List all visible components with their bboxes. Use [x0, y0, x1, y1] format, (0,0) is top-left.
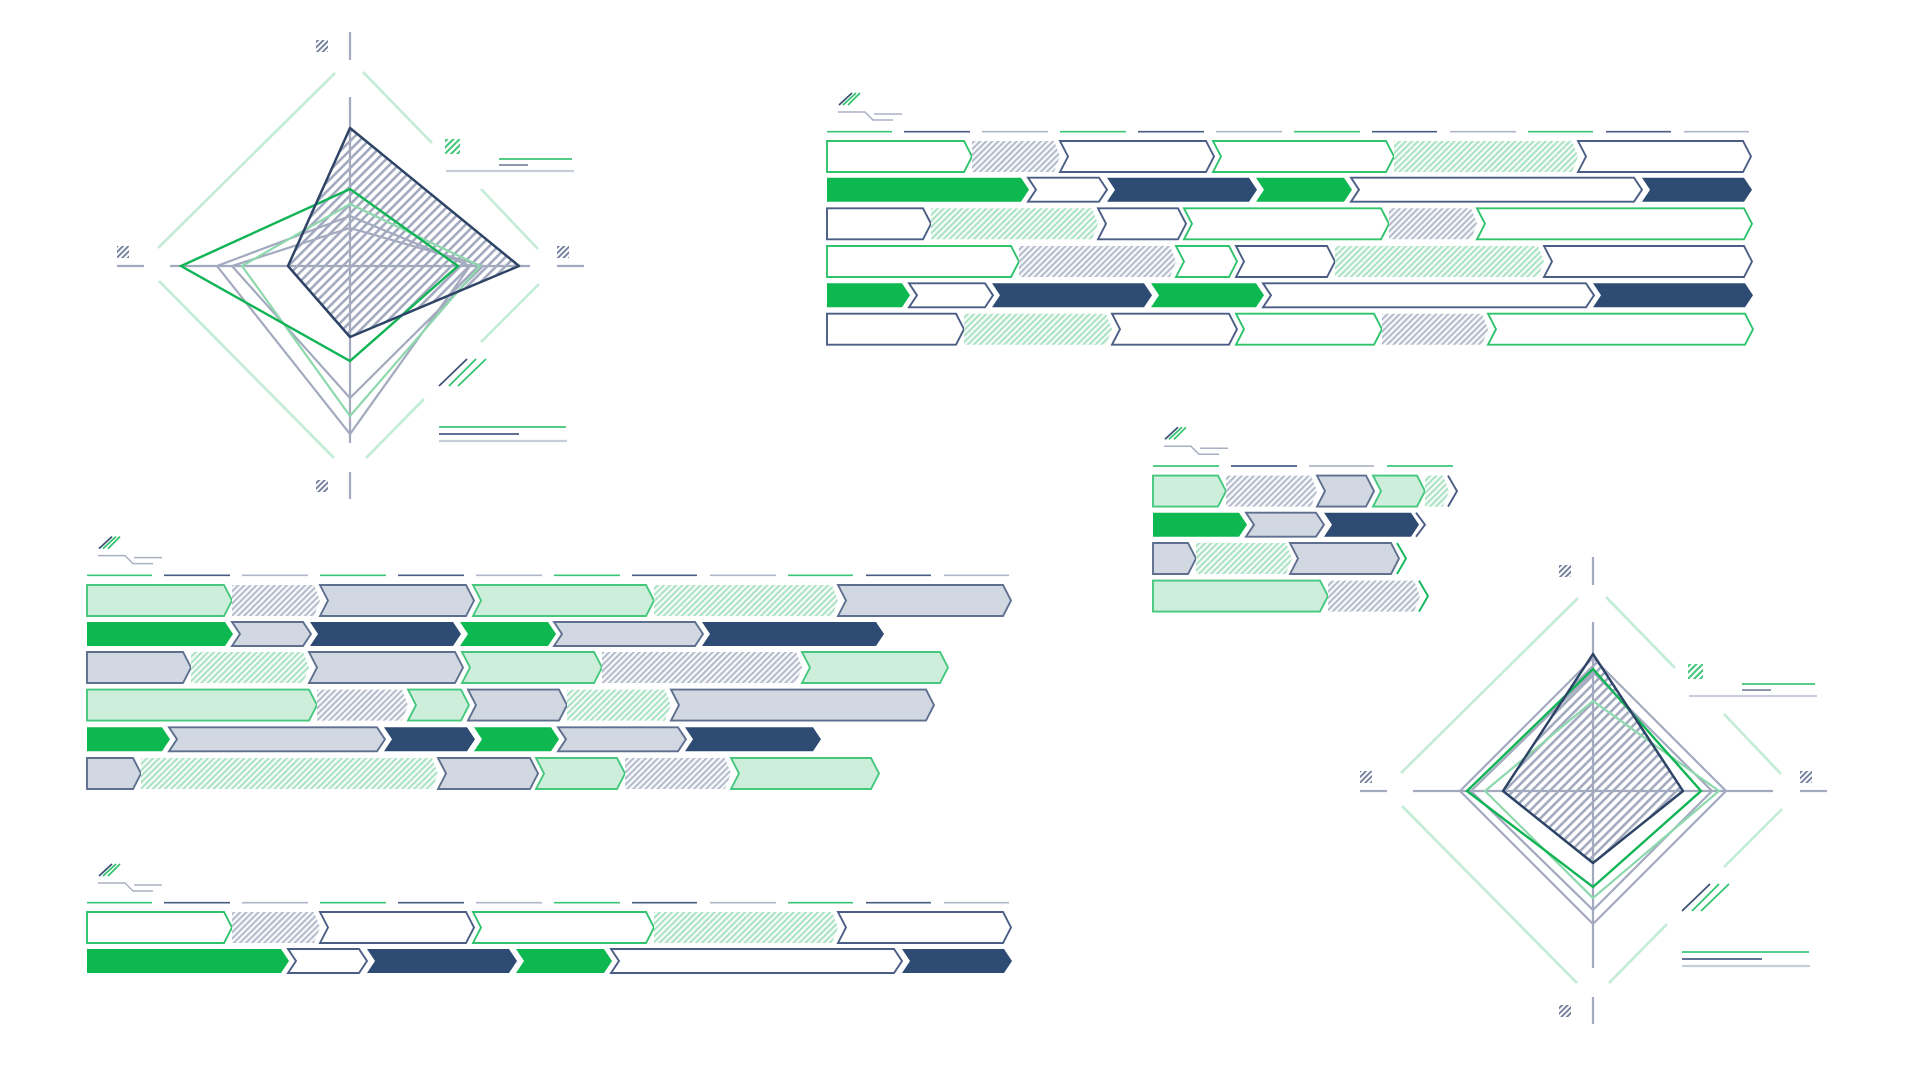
bar row 1: [87, 912, 1011, 943]
bar row 1: [87, 585, 1011, 616]
series: light green: [1485, 701, 1719, 898]
radar chart: bottom right: [1360, 557, 1827, 1024]
bar row 3: [87, 652, 948, 683]
bar row 4: [1153, 581, 1428, 612]
header connector lines: [98, 883, 162, 891]
series: navy: [288, 128, 519, 337]
radar chart: top left: [117, 32, 584, 499]
series: grey inner: [1471, 672, 1712, 910]
bar row 5: [87, 727, 821, 751]
bar row 1: [827, 141, 1751, 172]
bar row 6: [827, 314, 1753, 345]
axis icon: bottom: [316, 480, 328, 492]
bar row 4: [827, 246, 1752, 277]
series: green: [1467, 669, 1701, 887]
axes: [117, 32, 584, 499]
header icon: slashes: [839, 93, 860, 105]
radar area: navy hatched fill: [1503, 654, 1683, 863]
panel: top right outlined bars: [827, 93, 1753, 345]
legend icon: slashes: [439, 359, 486, 386]
radar area: navy hatched fill: [288, 128, 519, 337]
legend lines: lower: [1682, 952, 1810, 966]
axis icon: bottom: [1559, 1005, 1571, 1017]
legend lines: lower: [439, 427, 567, 441]
bar row 6: [87, 758, 879, 789]
bar row 5: [827, 283, 1753, 307]
header connector lines: [838, 112, 902, 120]
header connector lines: [1164, 446, 1228, 454]
series: grey inner: [232, 228, 483, 398]
dashed scale: [1153, 465, 1453, 467]
axis icon: top: [1559, 565, 1571, 577]
bar row 2: [87, 949, 1012, 973]
outer diamond frame: [158, 72, 539, 458]
axis icon: right: [557, 246, 569, 258]
panel: bottom left two row bars: [87, 864, 1012, 973]
series: grey outer: [217, 216, 470, 434]
dashed scale: [87, 902, 1009, 904]
bar row 3: [827, 208, 1752, 239]
legend icon: green hatch: [1688, 664, 1703, 679]
axis icon: left: [117, 246, 129, 258]
series: grey outer: [1460, 658, 1726, 924]
panel: lower left filled bars: [87, 537, 1011, 789]
axis icon: left: [1360, 771, 1372, 783]
legend lines: upper: [446, 159, 574, 171]
panel: middle small bars: [1153, 427, 1457, 612]
outer diamond frame: [1401, 597, 1782, 983]
dashed scale: [827, 131, 1749, 133]
axis icon: top: [316, 40, 328, 52]
header icon: slashes: [99, 537, 120, 549]
header icon: slashes: [99, 864, 120, 876]
series: light green: [242, 204, 480, 416]
bar row 2: [87, 622, 884, 646]
legend lines: upper: [1689, 684, 1817, 696]
header connector lines: [98, 556, 162, 564]
bar row 1: [1153, 476, 1457, 507]
series: green: [181, 189, 458, 361]
bar row 2: [827, 178, 1752, 202]
axis icon: right: [1800, 771, 1812, 783]
legend icon: green hatch: [445, 139, 460, 154]
legend icon: slashes: [1682, 884, 1729, 911]
header icon: slashes: [1165, 427, 1186, 439]
dashed scale: [87, 574, 1009, 576]
series: navy: [1503, 654, 1683, 863]
axes: [1360, 557, 1827, 1024]
bar row 2: [1153, 513, 1425, 537]
bar row 3: [1153, 543, 1406, 574]
bar row 4: [87, 690, 934, 721]
